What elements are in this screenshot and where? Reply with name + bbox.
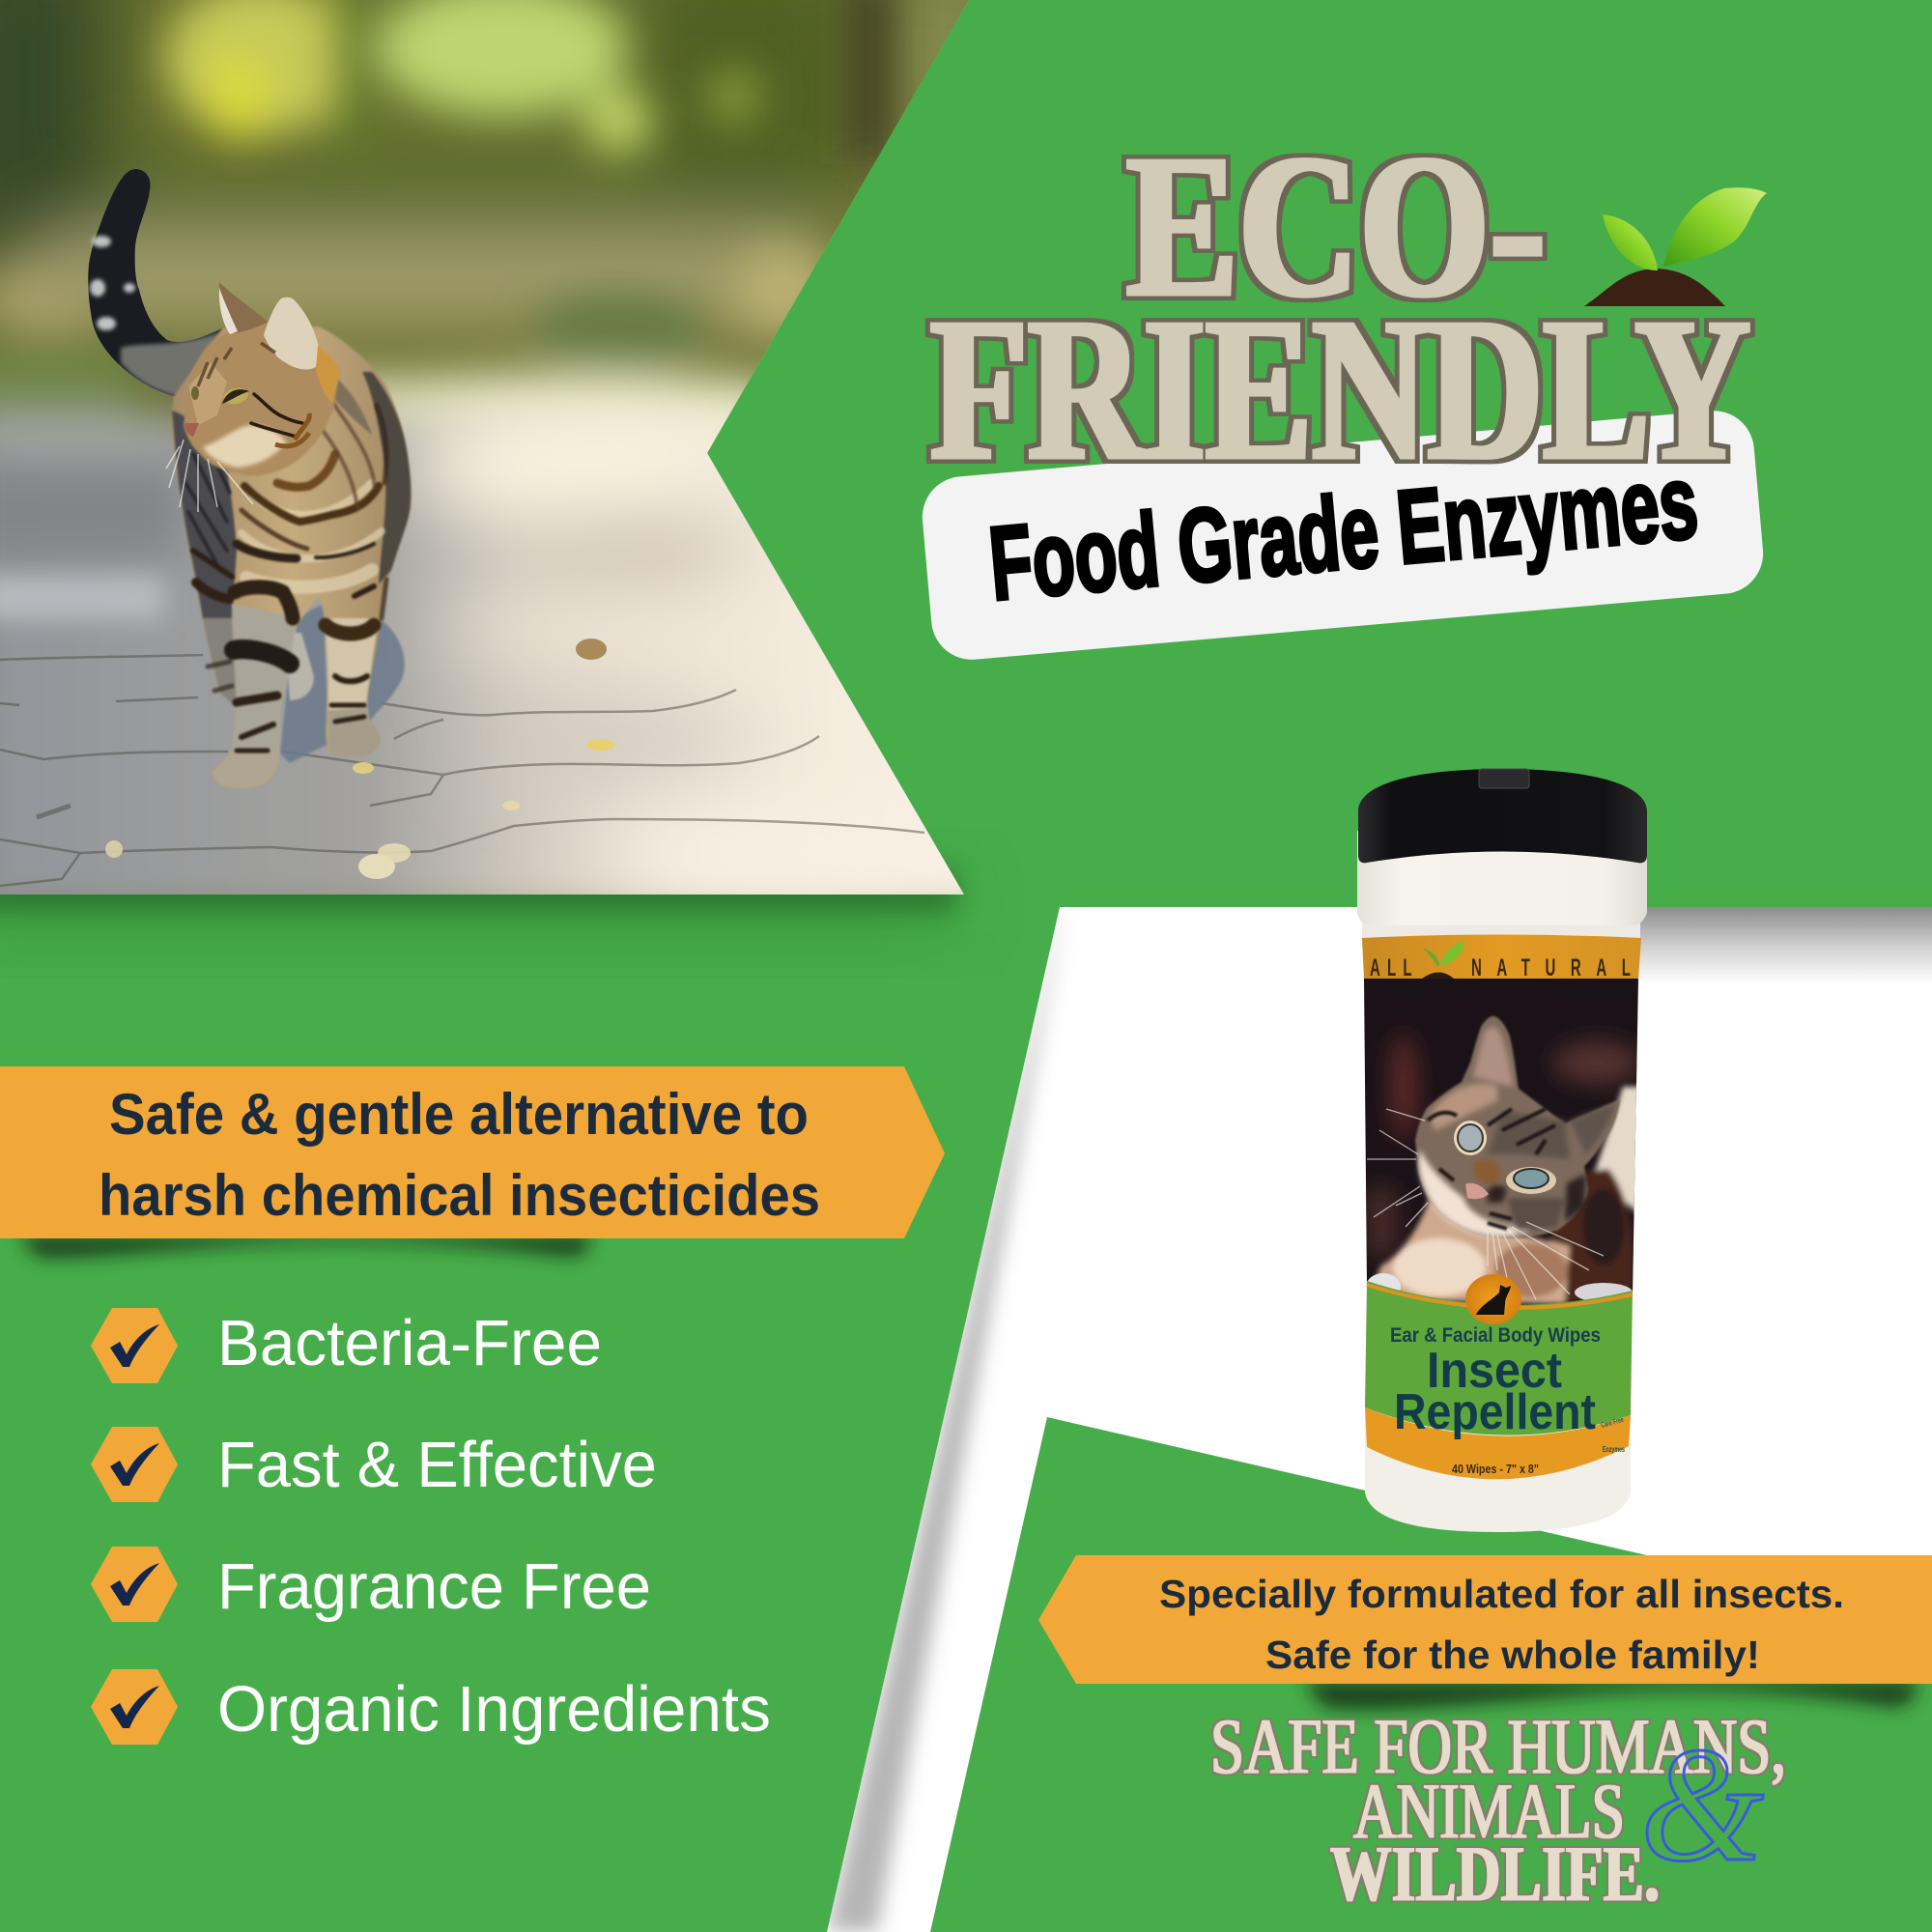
banner: specially formulated [1038, 1555, 1932, 1684]
slogan: safe for humans, animals and wildlife [1210, 1702, 1786, 1918]
canister lower white body [1365, 1410, 1631, 1532]
label top orange band with ALL NATURAL [1362, 935, 1646, 981]
label green band with product name: Care Free [1600, 1415, 1625, 1430]
cat [88, 169, 411, 788]
label green band with product name: 40 Wipes - 7" x 8" [1452, 1462, 1539, 1476]
icon: check hexagon 4 [91, 1669, 178, 1745]
cat head [166, 282, 340, 512]
photo: cat walking on a path [0, 0, 1005, 918]
ampersand: & [1640, 1714, 1764, 1895]
title line: ECO-: ECO- [1126, 112, 1546, 339]
label green band with product name: Repellent [1394, 1384, 1596, 1440]
label green band with product name: Insect [1427, 1343, 1562, 1399]
cat chest highlights [242, 483, 382, 587]
cat body and legs [171, 327, 411, 788]
banner: safe and gentle alternative: harsh chemical insecticides [99, 1163, 820, 1228]
shadow under bottom banner [1304, 1681, 1918, 1710]
road cracks and fallen leaves [0, 655, 924, 886]
banner: specially formulated: Specially formulated for all insects. [1159, 1572, 1844, 1616]
list item: Bacteria-Free: Bacteria-Free [217, 1307, 602, 1379]
label top orange band with ALL NATURAL: NATURAL [1471, 954, 1646, 981]
cat grey flanks, legs and paws [172, 357, 411, 788]
sticker: food grade enzymes plate [919, 408, 1767, 663]
list item: Organic Ingredients: Organic Ingredients [217, 1673, 771, 1746]
checklist [91, 1307, 771, 1746]
label top orange band with ALL NATURAL: ALL [1370, 954, 1419, 981]
shadow under left banner [17, 1236, 591, 1258]
photo background: blurred trees, grass and road [0, 0, 1005, 918]
canister black cap [1358, 769, 1647, 863]
slogan: safe for humans, animals and wildlife: WILDLIFE. [1330, 1830, 1660, 1918]
icon: sprout in soil [1584, 187, 1767, 306]
list item: Fast & Effective: Fast & Effective [217, 1429, 657, 1501]
banner: safe and gentle alternative [0, 1066, 945, 1238]
list item: Fragrance Free: Fragrance Free [217, 1550, 651, 1623]
label photo panel [1364, 979, 1638, 1305]
panel: top green arrow [707, 0, 1932, 907]
banner: safe and gentle alternative: Safe & gentle alternative to [109, 1082, 809, 1147]
product: wipes canister [1357, 769, 1647, 1532]
bottle cat: eyes, nose and stripes [1367, 1109, 1604, 1299]
panel: lower left green [0, 895, 1060, 1932]
shadow on white area [827, 907, 1932, 1932]
canister neck [1362, 918, 1640, 947]
title: Eco-Friendly [930, 112, 1750, 502]
bottle cat: back, cream patch and chest [1367, 1087, 1642, 1304]
icon: check hexagon 3 [91, 1547, 178, 1622]
icon: check hexagon 1 [91, 1308, 178, 1383]
slogan: safe for humans, animals and wildlife: ANIMALS [1353, 1767, 1625, 1855]
badge: cat silhouette [1465, 1274, 1521, 1324]
cat tail [88, 169, 224, 406]
bottle cat: head [1415, 1016, 1620, 1238]
label green band with product name [1365, 1274, 1633, 1479]
canister collar [1357, 831, 1647, 925]
shadow below photo [0, 869, 956, 937]
banner: specially formulated: Safe for the whole family! [1265, 1633, 1760, 1677]
cat cast shadow [280, 604, 405, 763]
icon: check hexagon 2 [91, 1427, 178, 1502]
label green band with product name: Ear & Facial Body Wipes [1390, 1324, 1601, 1347]
label green band with product name: Enzymes [1603, 1445, 1625, 1454]
panel: lower right green corner [930, 1417, 1932, 1932]
cat stripes [185, 396, 386, 751]
